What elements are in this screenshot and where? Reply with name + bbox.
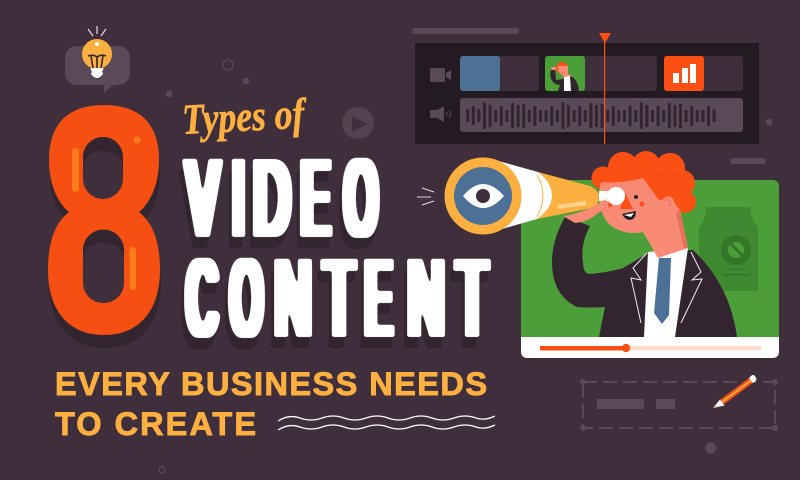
eye and cheeks: [608, 195, 644, 207]
heading: VIDEO: E: [302, 137, 329, 258]
clip: orange chart: [664, 56, 743, 91]
big number 8: [48, 73, 161, 374]
shirt: [644, 248, 688, 337]
ear: [662, 196, 674, 210]
progress bar: [540, 344, 761, 352]
face and neck: [599, 178, 688, 258]
icon: product package: [699, 207, 758, 291]
lens ring: [444, 158, 522, 234]
jacket: [552, 217, 737, 337]
icon: eye: [463, 184, 504, 208]
big number 8: 8: [54, 73, 154, 374]
eyepiece: [599, 187, 625, 205]
heading: CONTENT: E: [366, 237, 391, 358]
icon: play button: [342, 107, 374, 139]
script heading: Types of: Types of: [181, 91, 308, 144]
panel: video player: [521, 180, 779, 358]
dash near telescope: [417, 196, 431, 198]
hand: [563, 199, 606, 223]
infographic canvas: T: [457, 237, 487, 358]
mouth: [622, 211, 636, 220]
panel: video editing timeline: [415, 33, 759, 144]
heading: CONTENT: N: [408, 237, 444, 358]
telescope tube: [495, 160, 552, 231]
heading: CONTENT: N: [275, 237, 311, 358]
infographic canvas: O: [345, 137, 377, 258]
dashed selection box: [580, 379, 778, 431]
hair: [592, 151, 696, 213]
nose: [620, 193, 633, 209]
clip: presenter thumbnail: [545, 56, 657, 91]
tie: [654, 258, 671, 324]
heading: CONTENT: O: [231, 237, 262, 358]
heading: VIDEO: D: [254, 137, 290, 258]
lapels: [631, 252, 702, 323]
decorative dots and rings: [159, 28, 772, 473]
playhead: [599, 33, 611, 144]
clip: blue: [460, 56, 539, 91]
sound lines: [422, 188, 434, 205]
icon: speaker: [430, 106, 450, 122]
character: presenter: [552, 151, 737, 337]
heading: CONTENT: C: [187, 237, 217, 358]
heading: CONTENT: T: [324, 237, 354, 358]
icon: camera: [430, 68, 451, 82]
subheading: to create: TO CREATE: [55, 406, 256, 442]
subheading: every business needs: EVERY BUSINESS NEEDS: [55, 366, 487, 402]
heading: VIDEO: I: [234, 137, 244, 258]
audio waveform: [460, 98, 743, 132]
telescope: [422, 158, 625, 234]
icon: light bulb in speech bubble: [65, 26, 130, 93]
icon: pencil: [713, 375, 756, 408]
wavy underline: [278, 416, 495, 430]
heading: VIDEO: V: [187, 137, 218, 258]
